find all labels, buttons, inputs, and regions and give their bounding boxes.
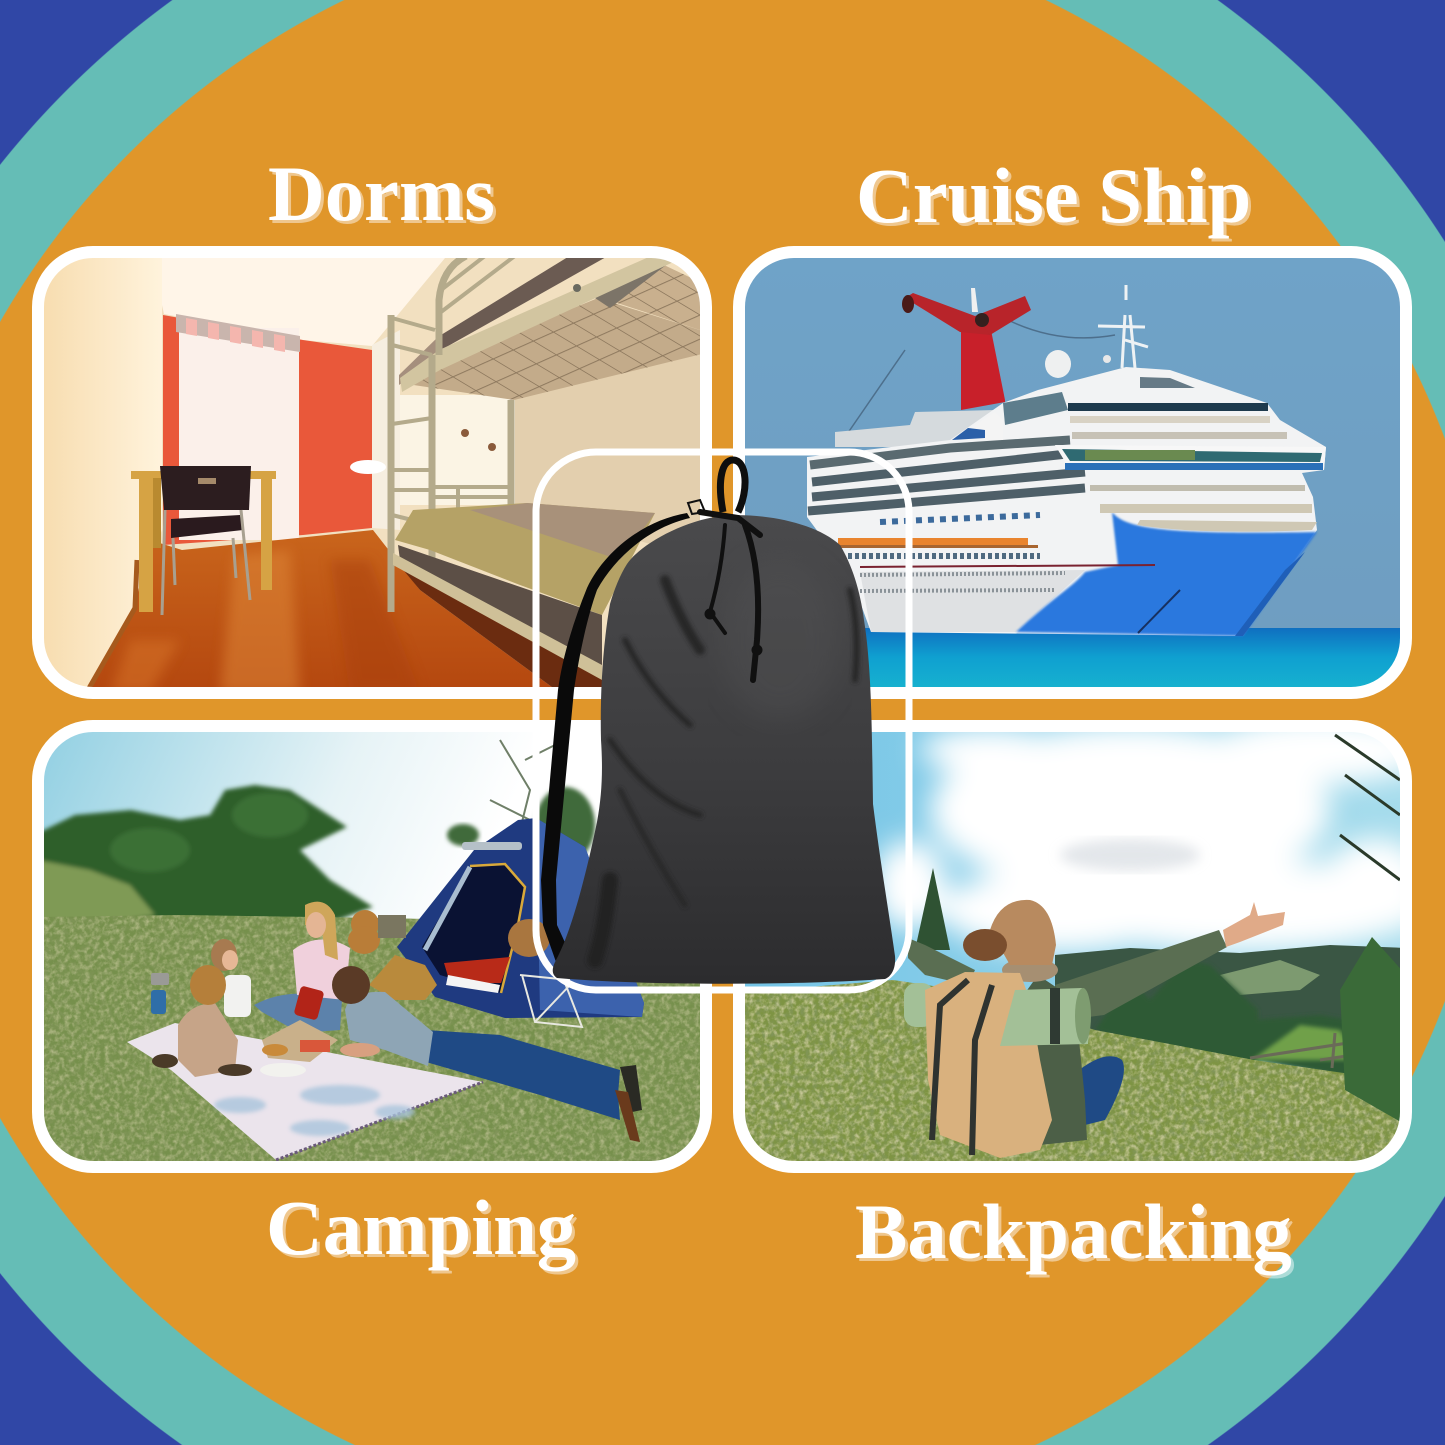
heading: Cruise Ship: Cruise Ship bbox=[856, 153, 1251, 240]
laundry bag bbox=[541, 460, 895, 984]
mountains bbox=[1055, 945, 1406, 1050]
white side wall bbox=[372, 330, 400, 530]
drawstring cords bbox=[688, 500, 762, 680]
fence bbox=[1250, 1033, 1400, 1068]
grass bbox=[38, 915, 706, 1167]
lifeboats bbox=[838, 538, 1038, 548]
girl bbox=[211, 939, 251, 1017]
rear wall behind bunk bbox=[515, 354, 700, 544]
man lying down bbox=[332, 966, 642, 1142]
panel: camping photo bbox=[38, 726, 706, 1167]
panorama lounge bbox=[1055, 445, 1326, 470]
hull diagonal line bbox=[1138, 590, 1180, 633]
bedroll back end bbox=[904, 983, 934, 1027]
bed rail bbox=[393, 553, 602, 680]
tree line bbox=[38, 785, 373, 935]
bunk frame bbox=[391, 252, 520, 612]
rear deck bbox=[835, 410, 1005, 447]
blanket bbox=[127, 1023, 483, 1160]
left wall bbox=[38, 252, 162, 693]
picnic basket bbox=[369, 955, 437, 1000]
tent bbox=[397, 818, 644, 1018]
hair bbox=[990, 900, 1056, 965]
left arm bbox=[908, 938, 975, 985]
fabric folds bbox=[595, 580, 857, 960]
thermos bbox=[294, 985, 324, 1021]
table bbox=[131, 471, 276, 612]
shoulder strap bbox=[541, 513, 690, 962]
teddy bear bbox=[348, 910, 380, 954]
mattress side bbox=[398, 545, 602, 668]
window curtain bbox=[176, 314, 300, 540]
orange back wall bbox=[163, 315, 372, 545]
sea bbox=[865, 628, 1400, 687]
pack straps bbox=[932, 980, 992, 1155]
bag body bbox=[553, 515, 895, 984]
floor reflections bbox=[112, 550, 394, 687]
pine trees bbox=[915, 868, 1406, 1125]
chair bbox=[160, 466, 251, 615]
dark floor under bed bbox=[404, 571, 602, 687]
upper bunk mattress bbox=[442, 258, 604, 348]
ship hull and superstructure bbox=[807, 367, 1326, 636]
panel frames bbox=[38, 252, 1406, 1167]
bedspread bbox=[395, 503, 655, 615]
meadow bbox=[739, 980, 1406, 1167]
red funnel bbox=[902, 288, 1031, 410]
radome bbox=[1045, 350, 1071, 378]
ceiling bbox=[162, 258, 445, 346]
sink bbox=[350, 460, 386, 474]
heading: Backpacking: Backpacking bbox=[855, 1189, 1292, 1276]
jeans bbox=[1073, 1056, 1124, 1125]
panel: cruise ship photo bbox=[739, 252, 1406, 693]
woman in pink bbox=[254, 902, 350, 1033]
hand bbox=[1223, 902, 1285, 947]
jacket body bbox=[1020, 975, 1087, 1145]
mast bbox=[1098, 285, 1148, 368]
bunk side rail bbox=[400, 258, 672, 392]
panel: backpacking photo bbox=[739, 716, 1430, 1167]
heading: Camping: Camping bbox=[266, 1185, 576, 1272]
highlight bbox=[720, 560, 840, 720]
forest bbox=[1095, 960, 1406, 1090]
right arm bbox=[1055, 930, 1227, 1020]
backpack bbox=[925, 972, 1052, 1158]
camping stove bbox=[151, 973, 169, 1014]
lower windows bbox=[848, 515, 1040, 556]
bedroll bbox=[1000, 988, 1091, 1046]
distant tree behind tent bbox=[447, 740, 595, 863]
ship deck shadow bbox=[1003, 392, 1068, 425]
center frame bbox=[536, 452, 909, 990]
scarf and neck bbox=[1002, 958, 1058, 982]
pine branches top right bbox=[1335, 730, 1400, 880]
wood floor bbox=[87, 530, 560, 693]
illustration: photo panels and laundry bag bbox=[32, 246, 1412, 1173]
panel: dorm room photo bbox=[38, 252, 706, 693]
folding chair bbox=[520, 970, 582, 1027]
picnic food bbox=[260, 1020, 338, 1077]
bucket bbox=[378, 915, 406, 938]
baseboard bbox=[88, 560, 137, 690]
clouds bbox=[874, 716, 1430, 952]
hat bbox=[508, 919, 550, 957]
hooks bbox=[461, 429, 469, 437]
hull grey side bbox=[860, 570, 1085, 632]
red waterline bbox=[860, 565, 1155, 567]
blue hull bbox=[1016, 512, 1317, 636]
hanging loop bbox=[720, 460, 745, 512]
boy bbox=[152, 965, 252, 1077]
bunk underside mesh bbox=[414, 266, 700, 400]
side deck stripes bbox=[808, 440, 1085, 511]
rigging bbox=[848, 322, 1115, 431]
hair bun bbox=[963, 929, 1007, 961]
front upper windows bbox=[1068, 403, 1268, 411]
heading: Dorms: Dorms bbox=[268, 151, 495, 238]
hiker bbox=[904, 900, 1285, 1158]
